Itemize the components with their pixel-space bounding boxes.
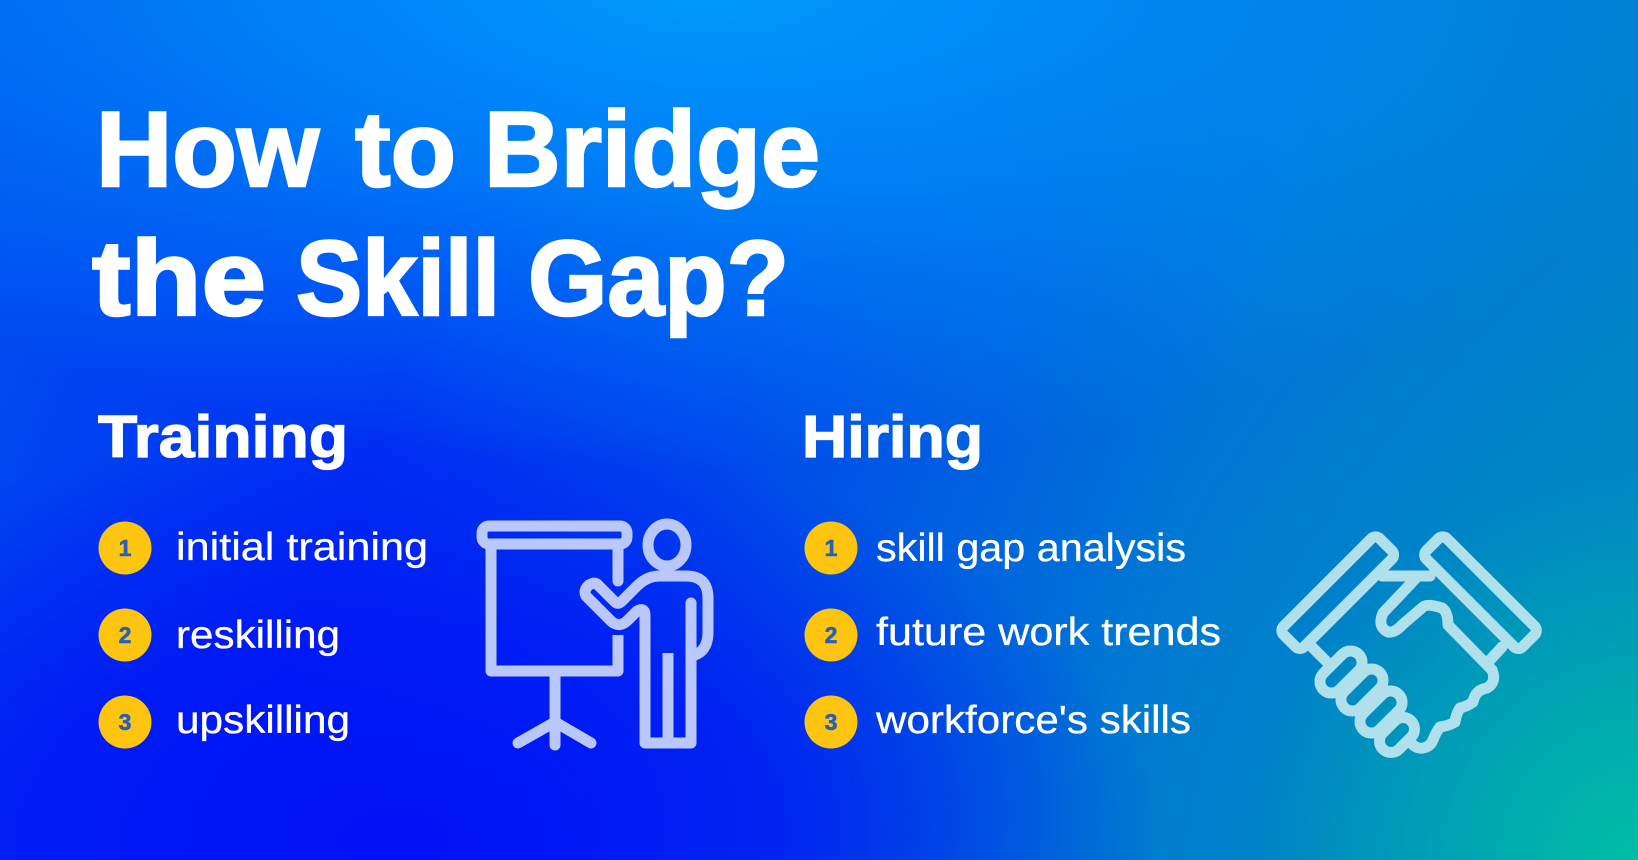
title: How [96, 89, 320, 209]
step 2: future work trends [876, 611, 1221, 654]
title: Bridge [484, 89, 820, 209]
title [92, 89, 820, 338]
step 1: 1 [825, 535, 838, 561]
step 1 [804, 522, 1186, 574]
step 1: 1 [119, 535, 132, 561]
step 2: 2 [119, 622, 131, 648]
step 2: 2 [825, 622, 837, 648]
icon: handshake [1279, 534, 1539, 757]
list: hiring steps [804, 522, 1221, 748]
step 3: 3 [119, 709, 131, 735]
step 3: upskilling [176, 699, 350, 742]
heading: hiring: Hiring [802, 404, 983, 470]
step 1: skill gap analysis [876, 527, 1186, 570]
step 1: initial training [176, 526, 428, 569]
step 3 [804, 696, 1191, 748]
title: to [355, 89, 456, 209]
title: the [92, 218, 266, 338]
icon: presenter at board [482, 524, 708, 745]
title: Gap? [528, 218, 789, 338]
list: training steps [98, 522, 428, 748]
step 2: reskilling [176, 614, 340, 657]
heading: training: Training [98, 404, 348, 470]
step 2 [98, 608, 340, 662]
step 2 [804, 608, 1221, 662]
panel: training [98, 404, 708, 748]
title: Skill [296, 218, 500, 338]
panel: hiring [802, 404, 1539, 757]
step 3: 3 [825, 709, 837, 735]
step 1 [98, 522, 428, 574]
step 3: workforce's skills [875, 699, 1191, 742]
step 3 [98, 696, 350, 748]
